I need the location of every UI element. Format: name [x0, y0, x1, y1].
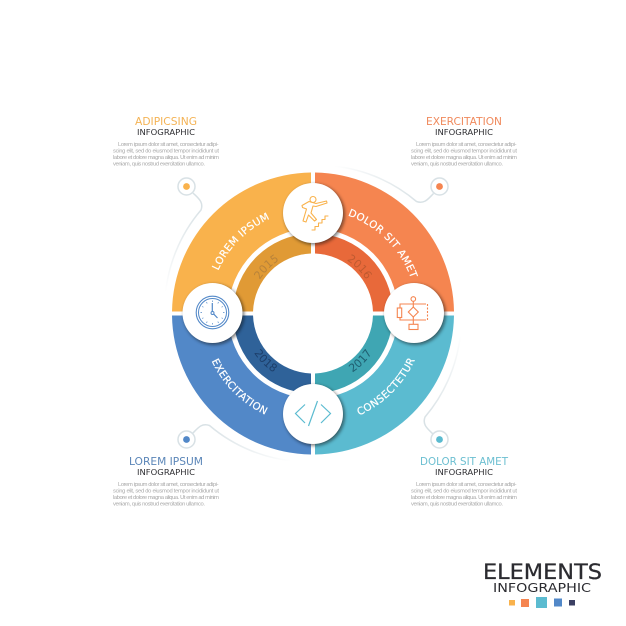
- segment: teal 2017: CONSECTETUR: [357, 358, 415, 414]
- connector: bottom right: [424, 327, 461, 448]
- body text: veniam, quis nostrud exercitation ullamco.: [113, 502, 205, 508]
- segment: orange 2016: [315, 172, 454, 312]
- text block: exercitation: [411, 116, 517, 168]
- text block: adipicsing: [113, 116, 219, 168]
- segment: blue 2018: EXERCITATION: [212, 358, 268, 414]
- heading: LOREM IPSUM: [129, 456, 203, 468]
- segment: yellow 2015: [172, 172, 311, 312]
- logo: elements infographic: ELEMENTS: [483, 560, 602, 584]
- body text: veniam, quis nostrud exercitation ullamco.: [113, 162, 205, 168]
- body text: [411, 482, 517, 508]
- body text: scing elit, sed do eiusmod tempor incididunt ut: [411, 488, 517, 494]
- body text: Lorem ipsum dolor sit amet, consectetur adipi-: [118, 142, 219, 148]
- text block: lorem ipsum: [113, 456, 219, 508]
- connector: top right: [326, 166, 448, 202]
- body text: scing elit, sed do eiusmod tempor incididunt ut: [113, 148, 219, 154]
- body text: labore et dolore magna aliqua. Ut enim ad minim: [113, 495, 219, 501]
- body text: [411, 142, 517, 168]
- body text: scing elit, sed do eiusmod tempor incididunt ut: [411, 148, 517, 154]
- body text: Lorem ipsum dolor sit amet, consectetur adipi-: [416, 482, 517, 488]
- heading: EXERCITATION: [426, 116, 502, 128]
- subheading: INFOGRAPHIC: [137, 467, 195, 477]
- segment: orange 2016: DOLOR SIT AMET: [348, 208, 418, 276]
- logo: elements infographic: INFOGRAPHIC: [493, 580, 591, 595]
- segment: orange 2016: 2016: [348, 254, 372, 278]
- icon: running figure on stairs: [283, 183, 344, 244]
- icon: code brackets: [283, 384, 344, 446]
- logo: elements infographic: [483, 560, 602, 608]
- connector: top left: [165, 178, 202, 300]
- body text: labore et dolore magna aliqua. Ut enim ad minim: [113, 155, 219, 161]
- text block: dolor sit amet: [411, 456, 517, 508]
- segment: yellow 2015: 2015: [254, 254, 278, 279]
- subheading: INFOGRAPHIC: [435, 467, 493, 477]
- body text: Lorem ipsum dolor sit amet, consectetur adipi-: [416, 142, 517, 148]
- body text: labore et dolore magna aliqua. Ut enim ad minim: [411, 495, 517, 501]
- segment: teal 2017: [315, 316, 454, 454]
- connector: bottom left: [178, 425, 300, 462]
- body text: Lorem ipsum dolor sit amet, consectetur adipi-: [118, 482, 219, 488]
- subheading: INFOGRAPHIC: [137, 127, 195, 137]
- body text: veniam, quis nostrud exercitation ullamco.: [411, 162, 503, 168]
- panel: circular diagram: [172, 172, 454, 454]
- body text: [113, 482, 219, 508]
- heading: DOLOR SIT AMET: [420, 456, 509, 468]
- heading: ADIPICSING: [135, 116, 197, 128]
- segment: teal 2017: 2017: [348, 349, 370, 372]
- body text: scing elit, sed do eiusmod tempor incididunt ut: [113, 488, 219, 494]
- icon: clock: [182, 283, 244, 344]
- segment: yellow 2015: LOREM IPSUM: [212, 212, 270, 270]
- body text: [113, 142, 219, 168]
- segment: blue 2018: 2018: [254, 349, 277, 372]
- subheading: INFOGRAPHIC: [435, 127, 493, 137]
- body text: veniam, quis nostrud exercitation ullamco.: [411, 502, 503, 508]
- icon: flowchart: [384, 283, 446, 344]
- segment: blue 2018: [172, 316, 311, 454]
- body text: labore et dolore magna aliqua. Ut enim ad minim: [411, 155, 517, 161]
